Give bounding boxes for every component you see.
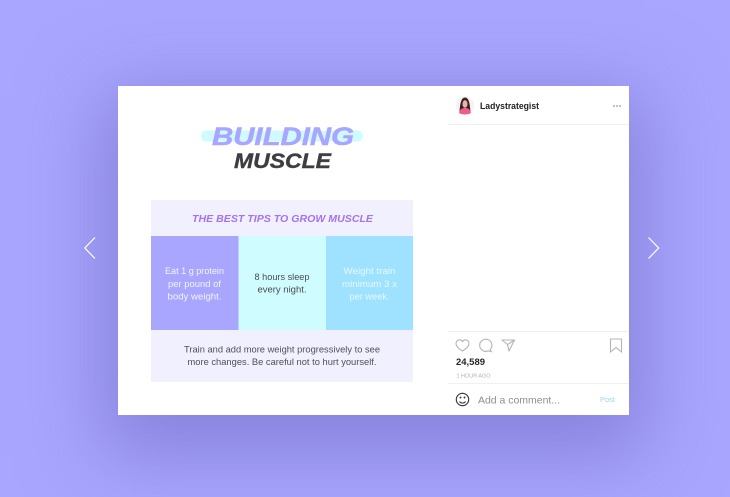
tip: protein: Eat 1 g protein: [165, 266, 224, 277]
tip: protein: body weight.: [168, 292, 222, 302]
like count: 24,589: [456, 357, 485, 367]
panel: tips: [151, 200, 413, 382]
tip: weight training: minimum 3 x: [342, 279, 397, 290]
card shadow: [128, 106, 619, 415]
icon: share: [502, 340, 514, 351]
tip: weight training: [326, 236, 413, 330]
previous arrow: [85, 238, 95, 258]
title line: muscle: MUSCLE: [234, 150, 332, 173]
icon: smiley: [456, 393, 469, 406]
username: Ladystrategist: [480, 101, 539, 111]
post card: [118, 86, 629, 415]
timestamp: 1 HOUR AGO: [456, 374, 491, 380]
post button: Post: [600, 395, 616, 404]
icon: bookmark: [610, 339, 622, 352]
icon: heart: [456, 340, 469, 351]
tip: protein: [151, 236, 238, 330]
tip: sleep: every night.: [258, 284, 306, 296]
title: [201, 123, 363, 173]
comment bar: [456, 393, 616, 406]
icon: comment: [480, 339, 492, 352]
tip: protein: per pound of: [168, 279, 221, 290]
icon: avatar: [456, 96, 474, 114]
comment input placeholder: Add a comment...: [478, 394, 560, 406]
next arrow: [648, 238, 659, 258]
panel background: [151, 200, 413, 382]
post header: [456, 96, 621, 114]
tip: weight training: per week.: [350, 292, 390, 302]
panel footer text: [184, 344, 380, 368]
panel footer text: more changes. Be careful not to hurt yourself.: [188, 357, 376, 368]
tip: weight training: Weight train: [344, 266, 396, 277]
tip: sleep: [238, 236, 326, 330]
title line: building: BUILDING: [212, 123, 354, 151]
panel footer text: Train and add more weight progressively to see: [184, 344, 380, 356]
tip: sleep: 8 hours sleep: [254, 272, 310, 283]
icon: more options: [613, 105, 621, 107]
title highlight: [201, 130, 363, 142]
panel heading: THE BEST TIPS TO GROW MUSCLE: [192, 213, 374, 225]
